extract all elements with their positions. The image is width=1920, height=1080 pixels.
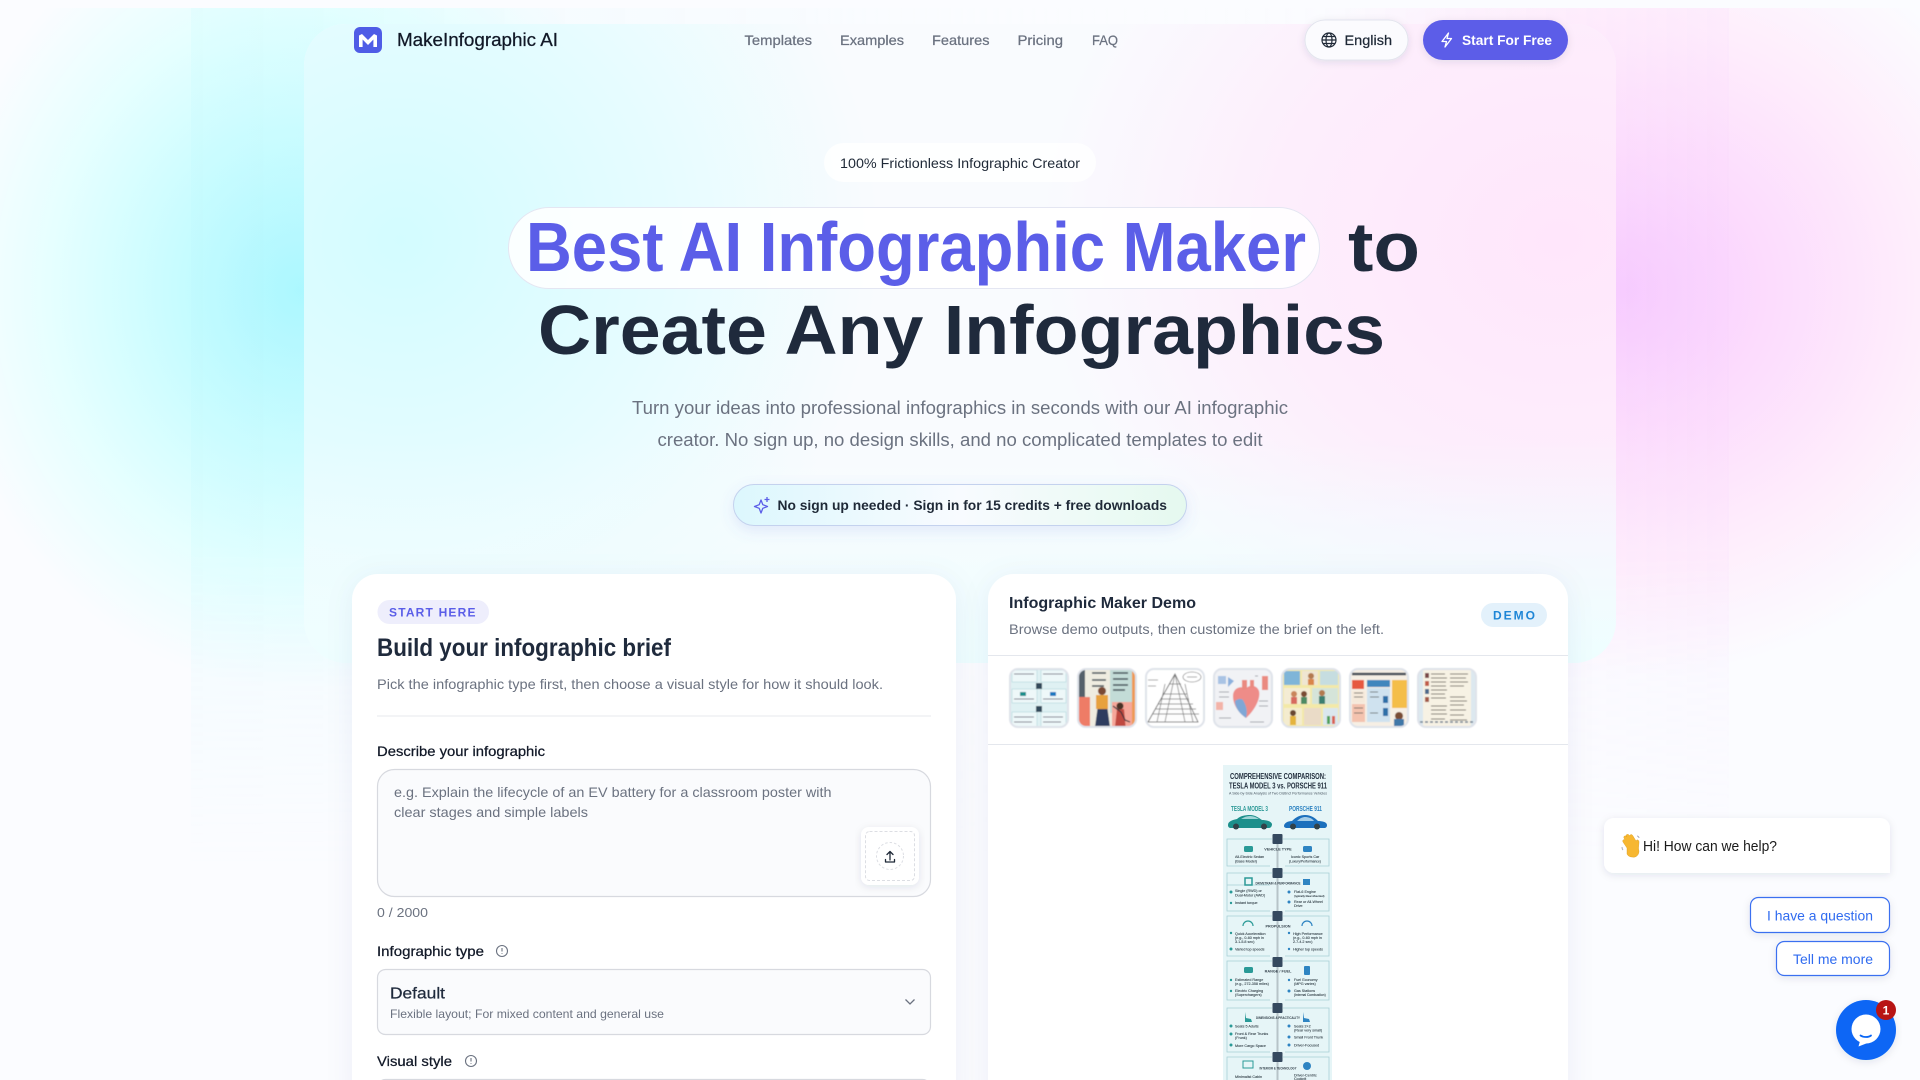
car: Tesla [1228,815,1272,830]
right column notes: (Rear very small) [1294,1028,1322,1032]
left column notes: 3.1-5.8 sec) [1235,940,1254,944]
panel: demo preview [988,574,1568,1080]
thumbnail 7: cream checklist [1418,669,1476,727]
reply button: question [1750,898,1890,932]
right column notes: Driver-Centric [1294,1074,1317,1078]
left column notes: Single (RWD) or [1235,889,1263,893]
reply button: more [1776,942,1890,976]
right column notes: (Luxury/Performance) [1289,860,1321,864]
greeting bubble: Hi! How can we help? [1643,839,1777,855]
infographic title: COMPREHENSIVE COMPARISON: [1230,772,1326,781]
demo infographic: Tesla vs Porsche: A Side-by-Side Analysis of Two Distinct Performance Vehicles [1229,792,1327,796]
demo infographic: Tesla vs Porsche: PORSCHE 911 [1289,804,1322,813]
icon: bolt [1442,33,1452,47]
nav links [744,32,1118,48]
demo infographic: Tesla vs Porsche [1223,765,1332,1080]
nav links: Templates [744,32,812,48]
icon: info [466,1056,476,1066]
right column notes: (e.g., 0-60 mph in [1293,936,1322,940]
infographic title: TESLA MODEL 3 vs. PORSCHE 911 [1229,782,1327,790]
right column notes: High Performance [1293,932,1323,936]
infographic type select: Default [390,986,446,1002]
left column notes: More Cargo Space [1235,1044,1266,1048]
start here tag: START HERE [389,606,476,620]
icon: sparkles [754,497,770,513]
right column notes: (MPG varies) [1294,982,1316,986]
label: visual style: Visual style [377,1053,452,1069]
model names: TESLA MODEL 3 [1231,804,1268,813]
infographic title [1229,773,1327,788]
hero glass panel [304,24,1616,663]
right column notes: Small Front Trunk [1294,1036,1323,1040]
left column notes: Minimalist Cabin [1235,1075,1262,1079]
right column notes: Iconic Sports Car [1291,855,1320,859]
left column notes: Varied top speeds [1235,948,1265,952]
brand name: MakeInfographic AI [397,30,558,50]
label: describe: Describe your infographic [377,743,545,759]
section labels: INTERIOR & TECHNOLOGY [1260,1066,1297,1070]
left column notes: (Superchargers) [1235,993,1262,997]
prompt text area: clear stages and simple labels [394,804,588,820]
left column notes: (e.g., 0-60 mph in [1235,936,1264,940]
left column notes: Quick Acceleration [1235,932,1266,936]
left column notes: Seats 5 Adults [1235,1024,1259,1028]
language button: English [1344,32,1392,48]
nav links: Features [932,32,990,48]
main heading [508,208,1420,369]
hero badge: 100% Frictionless Infographic Creator [840,155,1080,171]
row frames [1227,839,1329,1080]
start button [1423,20,1568,60]
main heading: Create Any Infographics [538,291,1385,369]
launcher button [1836,1000,1896,1060]
upload button [861,827,919,885]
nav links: Pricing [1018,32,1063,48]
main heading: Best AI Infographic Maker [526,208,1306,286]
left column notes: (Base Model) [1235,860,1257,864]
notification badge: 1 [1883,1004,1890,1018]
left column notes: Front & Rear Trunks [1235,1032,1268,1036]
credits pill [734,484,1186,526]
thumbnail strip [1010,669,1476,731]
icon: waving hand [1622,834,1639,857]
right column notes: (typically Rear-Mounted) [1294,894,1325,898]
section icons [1272,834,1282,1062]
visual style select [378,1080,930,1081]
chat widget [1604,818,1896,1060]
prompt text area [378,770,930,896]
right column notes: Higher top speeds [1293,948,1323,952]
thumbnail 3: line pyramid [1147,671,1202,724]
section labels [1256,848,1301,1070]
section labels: RANGE / FUEL [1265,970,1292,974]
heading highlight pill [508,208,1320,288]
left column notes: Dual-Motor (AWD) [1235,894,1265,898]
thumbnail 4: heart anatomy [1214,669,1272,727]
thumbnail 2: timeline poster [1078,669,1136,731]
nav links: Examples [840,32,904,48]
thumbnail 1: comparison [1010,669,1068,727]
right column notes: Seats 2+2 [1294,1024,1311,1028]
logo mark [354,27,382,53]
right column notes: Drive [1294,904,1303,908]
icon: globe [1322,33,1336,47]
center spine [1276,840,1278,1080]
right column notes: Fuel Economy [1294,978,1318,982]
start here tag [378,600,489,624]
right column notes: Flat-6 Engine [1294,890,1316,894]
form heading: Build your infographic brief [377,634,672,662]
reply button: question: I have a question [1767,908,1873,924]
icon: chat bubble [1852,1014,1880,1046]
right column notes [1289,855,1326,1080]
demo title: Infographic Maker Demo [1009,595,1196,612]
right column notes: (Internal Combustion) [1294,993,1326,997]
language button [1305,20,1408,60]
panel: infographic brief form [352,574,956,1080]
hero description: Turn your ideas into professional infographics in seconds with our AI infographic [632,398,1288,418]
left column notes: All-Electric Sedan [1235,855,1264,859]
section labels: VEHICLE TYPE [1264,848,1292,852]
hero description: creator. No sign up, no design skills, and no complicated templates to edit [658,430,1262,450]
thumbnail 6: mixed poster [1350,669,1408,727]
left column notes: (e.g., 272-358 miles) [1235,982,1269,986]
section labels: DRIVETRAIN & PERFORMANCE [1256,882,1301,886]
demo subtitle: Browse demo outputs, then customize the brief on the left. [1009,621,1384,637]
infographic type select [378,970,930,1034]
right column notes: Driver-Focused [1294,1044,1319,1048]
hero description [632,398,1288,450]
section labels: DIMENSIONS & PRACTICALITY [1256,1016,1300,1020]
thumbnail 5: comic panels [1282,669,1340,727]
form subtitle: Pick the infographic type first, then choose a visual style for how it should look. [377,676,883,692]
section labels: PROPULSION [1265,924,1291,928]
demo tag: DEMO [1493,608,1535,622]
infographic type select: Flexible layout; For mixed content and general use [390,1007,664,1021]
left column notes: Instant torque [1235,901,1258,905]
left column notes [1235,855,1269,1079]
page background glows [0,8,1920,676]
icon: info [496,946,508,956]
navigation bar [354,20,1568,60]
reply button: more: Tell me more [1793,951,1873,967]
thumbnail borders [1010,669,1476,727]
right column notes: Gas Stations [1294,989,1315,993]
greeting bubble [1604,818,1890,873]
start button: Start For Free [1462,32,1552,48]
nav links: FAQ [1092,32,1118,48]
main heading: to [1348,208,1420,286]
hero badge [824,143,1096,182]
credits pill: No sign up needed · Sign in for 15 credits + free downloads [778,497,1167,513]
character counter: 0 / 2000 [377,905,428,920]
right column notes: 2.7-4.2 sec) [1293,940,1312,944]
left column notes: Estimated Range [1235,978,1263,982]
section pictograms [1243,846,1312,1070]
label: infographic type: Infographic type [377,943,484,959]
left column notes: Electric Charging [1235,989,1263,993]
car: Porsche [1284,815,1327,830]
left column notes: (Frunk) [1235,1036,1247,1040]
note bullets [1230,890,1232,1046]
right column notes: Rear or All-Wheel [1294,900,1323,904]
prompt text area: e.g. Explain the lifecycle of an EV battery for a classroom poster with [394,784,832,800]
demo tag [1481,603,1547,627]
